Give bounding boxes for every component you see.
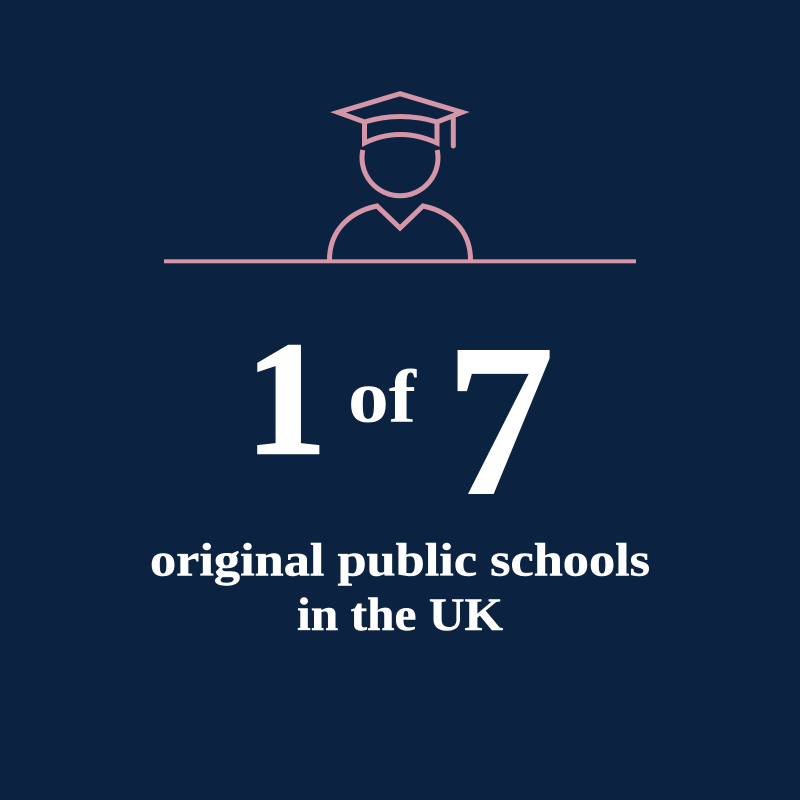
caption line 2: in the UK — [297, 589, 503, 641]
icon: tassel — [451, 118, 456, 146]
numeral 7: 7 — [445, 298, 555, 542]
word: of: of — [348, 356, 417, 439]
caption — [150, 534, 650, 641]
icon: head — [362, 150, 438, 196]
icon: mortarboard band — [364, 122, 437, 143]
caption line 1: original public schools — [150, 534, 650, 586]
divider line — [164, 259, 636, 263]
icon: graduate with mortarboard — [330, 94, 470, 260]
statistic: 1 of 7 — [246, 298, 555, 542]
numeral 1: 1 — [246, 310, 326, 489]
icon: shoulders — [330, 206, 470, 260]
icon: mortarboard top — [338, 94, 462, 122]
